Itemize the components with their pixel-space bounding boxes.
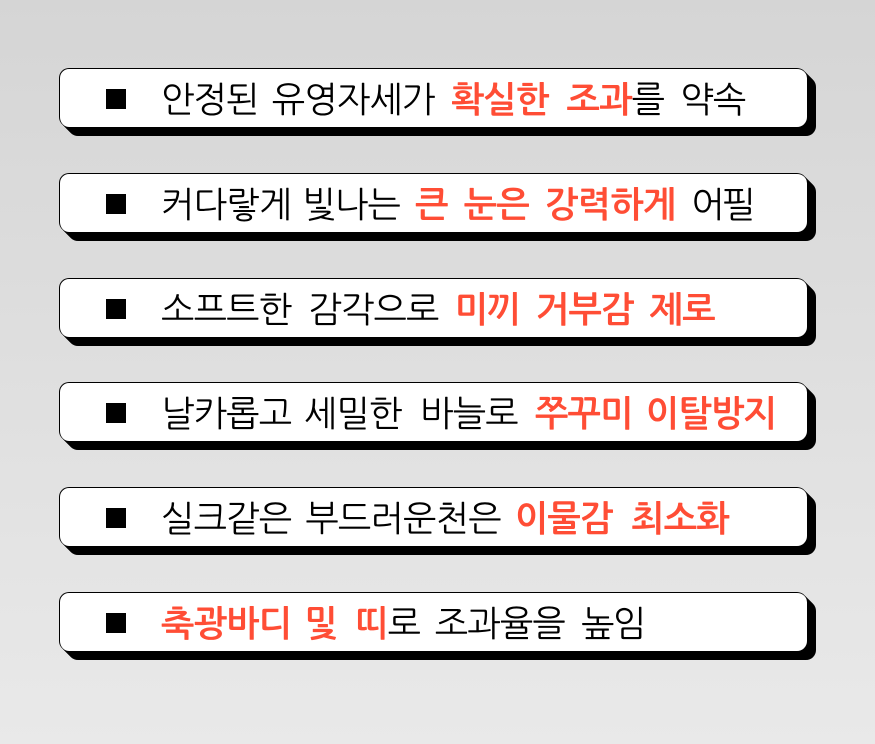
text: stable posture: 안정된 유영자세가 확실한 조과를 약속 bbox=[161, 80, 745, 120]
bullet icon bbox=[106, 613, 126, 633]
card: stable posture bbox=[59, 68, 807, 127]
card: big eyes bbox=[59, 173, 807, 232]
bullet icon bbox=[106, 508, 126, 528]
text: sharp needle: 날카롭고 세밀한 바늘로 쭈꾸미 이탈방지 bbox=[161, 394, 776, 434]
text: big eyes: 커다랗게 빛나는 큰 눈은 강력하게 어필 bbox=[161, 185, 753, 225]
text: soft feel: 소프트한 감각으로 미끼 거부감 제로 bbox=[161, 290, 715, 330]
card: sharp needle bbox=[59, 382, 807, 441]
bullet icon bbox=[106, 89, 126, 109]
text: luminous body: 축광바디 및 띠로 조과율을 높임 bbox=[161, 604, 645, 644]
text: silky fabric: 실크같은 부드러운천은 이물감 최소화 bbox=[161, 499, 729, 539]
card: luminous body bbox=[59, 592, 807, 651]
card: soft feel bbox=[59, 278, 807, 337]
bullet icon bbox=[106, 194, 126, 214]
card: silky fabric bbox=[59, 487, 807, 546]
bullet icon bbox=[106, 403, 126, 423]
bullet icon bbox=[106, 299, 126, 319]
